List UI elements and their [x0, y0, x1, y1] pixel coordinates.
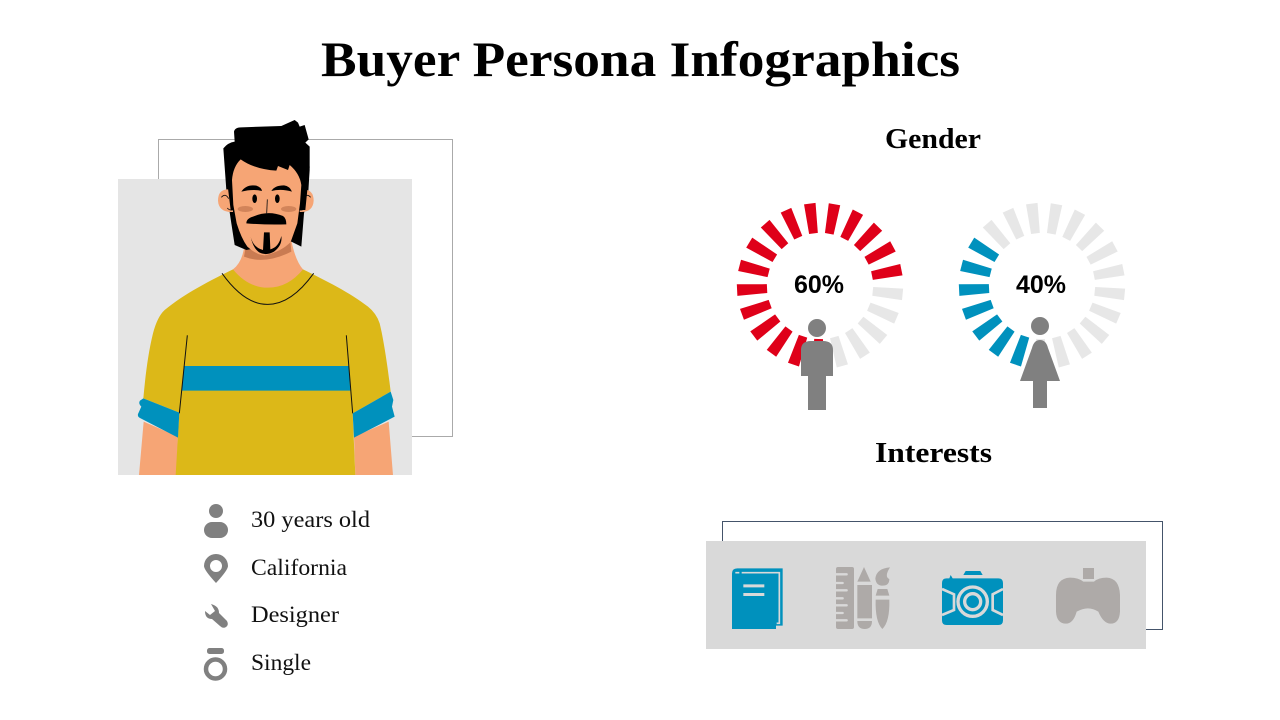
row: age [204, 504, 371, 538]
icon: male figure [801, 319, 833, 410]
icon: wrench [205, 604, 228, 628]
interests grey band [706, 541, 1146, 649]
interest icons [732, 567, 1120, 629]
occupation text: Designer [251, 602, 339, 627]
heading: gender: Gender [885, 124, 981, 155]
icon: ring [206, 648, 225, 678]
interests outline frame [722, 522, 1162, 630]
cheeks [238, 206, 253, 212]
panel: persona portrait [118, 120, 452, 475]
marital status text: Single [251, 650, 311, 675]
hair [223, 120, 310, 250]
sleeve cuffs [138, 392, 395, 438]
goatee [251, 232, 282, 254]
moustache [246, 213, 286, 225]
eyebrows [241, 185, 292, 192]
chart: male 60 percent ring [735, 201, 904, 410]
arms [139, 422, 393, 475]
ears [218, 189, 314, 212]
nose line [265, 199, 269, 214]
40 percent value: 40% [1016, 271, 1066, 299]
red ring segments [735, 201, 904, 371]
60 percent value: 60% [794, 271, 844, 299]
grey ring segments [979, 202, 1127, 371]
row: occupation [205, 602, 339, 628]
icon: camera [942, 571, 1003, 625]
title: Buyer Persona Infographics [321, 31, 960, 87]
eyes [252, 194, 280, 203]
ear lines [221, 195, 311, 210]
neck shadow [244, 237, 291, 260]
icon: book [732, 568, 783, 629]
row: location [204, 554, 347, 583]
panel: persona details list [204, 504, 371, 678]
age text: 30 years old [251, 507, 371, 532]
shirt seams [179, 273, 353, 413]
character illustration [138, 120, 395, 475]
neck [233, 237, 303, 288]
portrait grey backdrop [118, 179, 412, 475]
heading: interests: Interests [875, 438, 992, 469]
icon: game controller [1056, 568, 1120, 624]
row: marital status [206, 648, 311, 678]
panel: interests [706, 522, 1162, 649]
shirt [143, 269, 391, 475]
icon: map pin [204, 554, 228, 583]
blue ring segments [957, 237, 1033, 367]
shirt stripe [182, 366, 350, 391]
icon: female figure [1020, 317, 1060, 408]
icon: person [204, 504, 228, 538]
location text: California [251, 555, 347, 580]
grey ring segments [828, 284, 903, 369]
facial features [241, 185, 292, 254]
chart: female 40 percent ring [957, 202, 1127, 408]
portrait outline frame [158, 140, 452, 436]
icon: art tools [836, 567, 890, 629]
sideburns [225, 167, 310, 210]
face [232, 159, 301, 255]
